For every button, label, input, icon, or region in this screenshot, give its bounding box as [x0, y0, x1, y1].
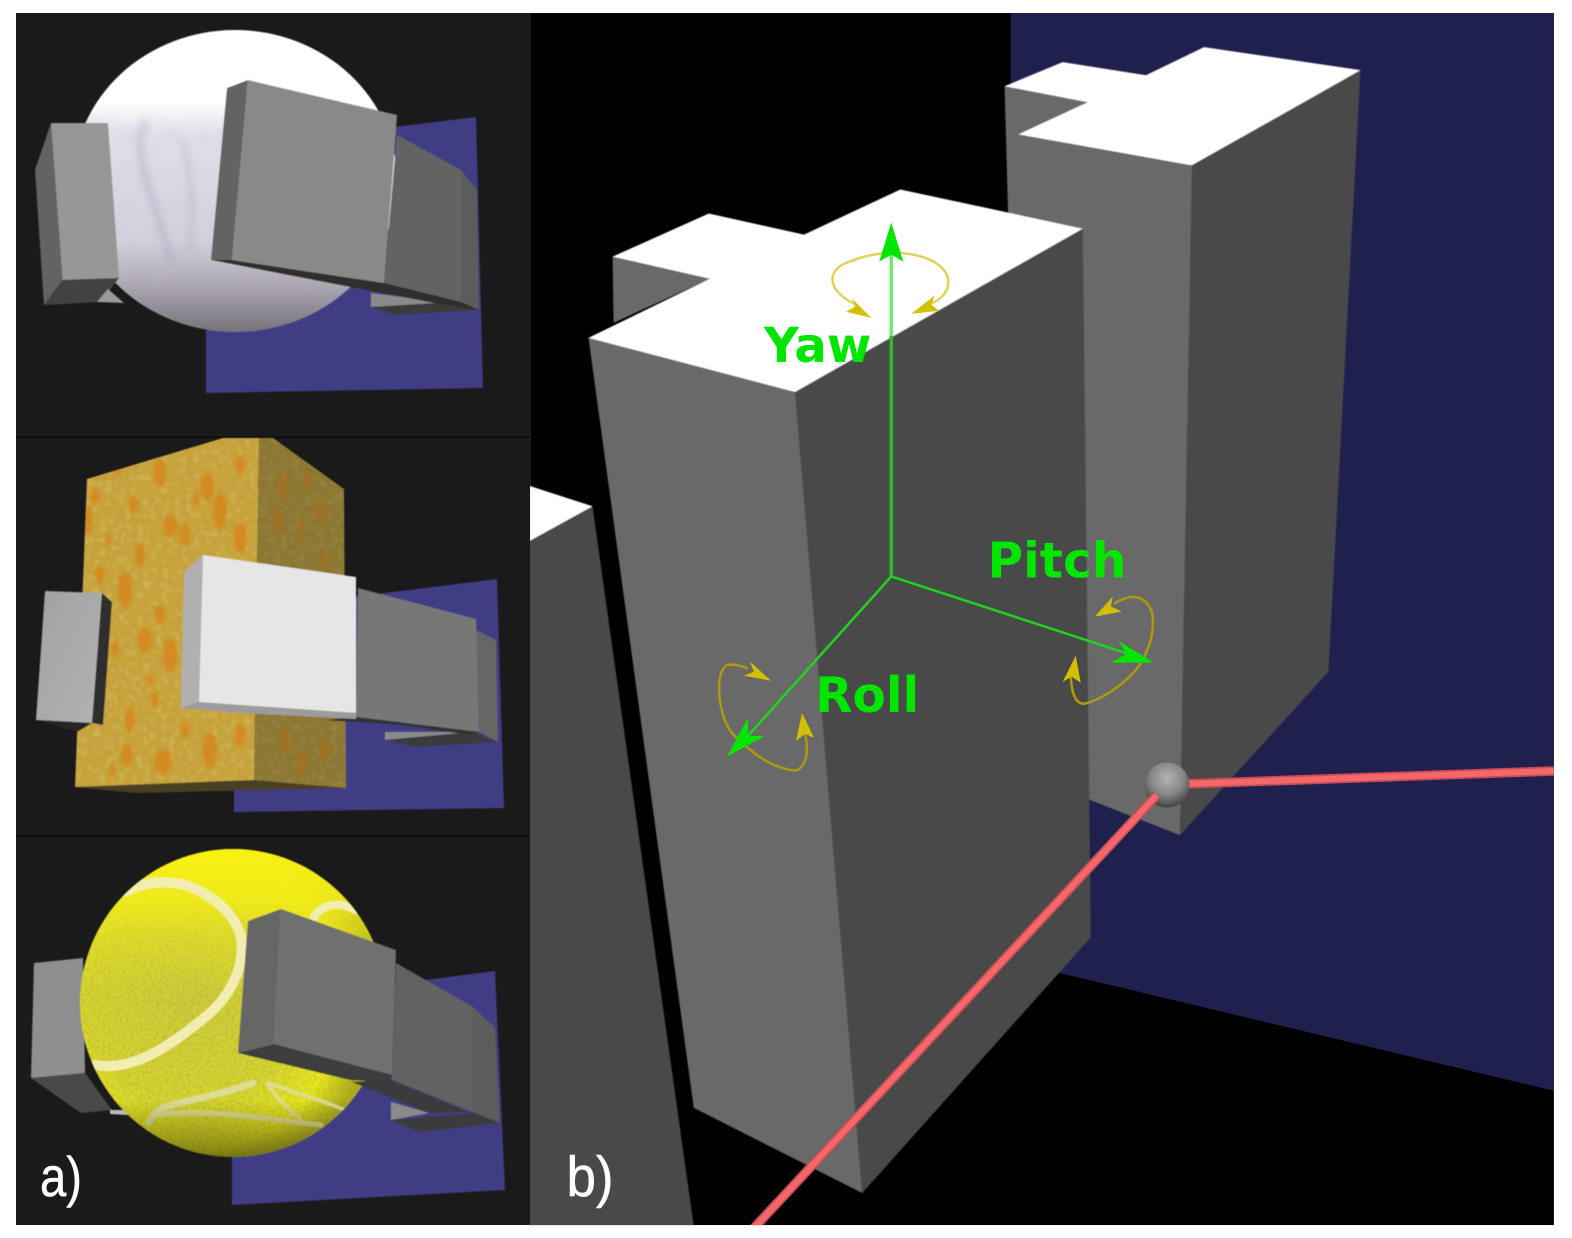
far left block — [521, 483, 695, 1233]
view: gripper on snowball — [35, 30, 483, 393]
view: gripper on tennis ball — [31, 848, 505, 1205]
red line to lower left — [753, 795, 1157, 1229]
roll rotation arrows — [719, 662, 814, 770]
label a): a) — [40, 1145, 82, 1208]
pitch label: Pitch — [988, 533, 1126, 589]
pitch axis arrow — [891, 576, 1154, 663]
red line to right — [1183, 771, 1554, 784]
label b): b) — [566, 1145, 614, 1208]
panel b: close-up of gripper fingers — [521, 13, 1554, 1233]
pitch rotation arrows — [1063, 597, 1153, 704]
yaw rotation arrows — [832, 253, 948, 318]
roll axis arrow — [727, 576, 891, 757]
panel a: object views — [16, 13, 530, 1225]
yaw axis arrow — [879, 223, 903, 576]
view: gripper on sponge — [36, 435, 504, 812]
contact point sphere — [1144, 762, 1190, 808]
back plate — [1011, 13, 1554, 1091]
front finger block — [588, 189, 1091, 1193]
back finger block — [1005, 47, 1360, 835]
roll label: Roll — [815, 668, 919, 724]
yaw label: Yaw — [763, 318, 871, 374]
